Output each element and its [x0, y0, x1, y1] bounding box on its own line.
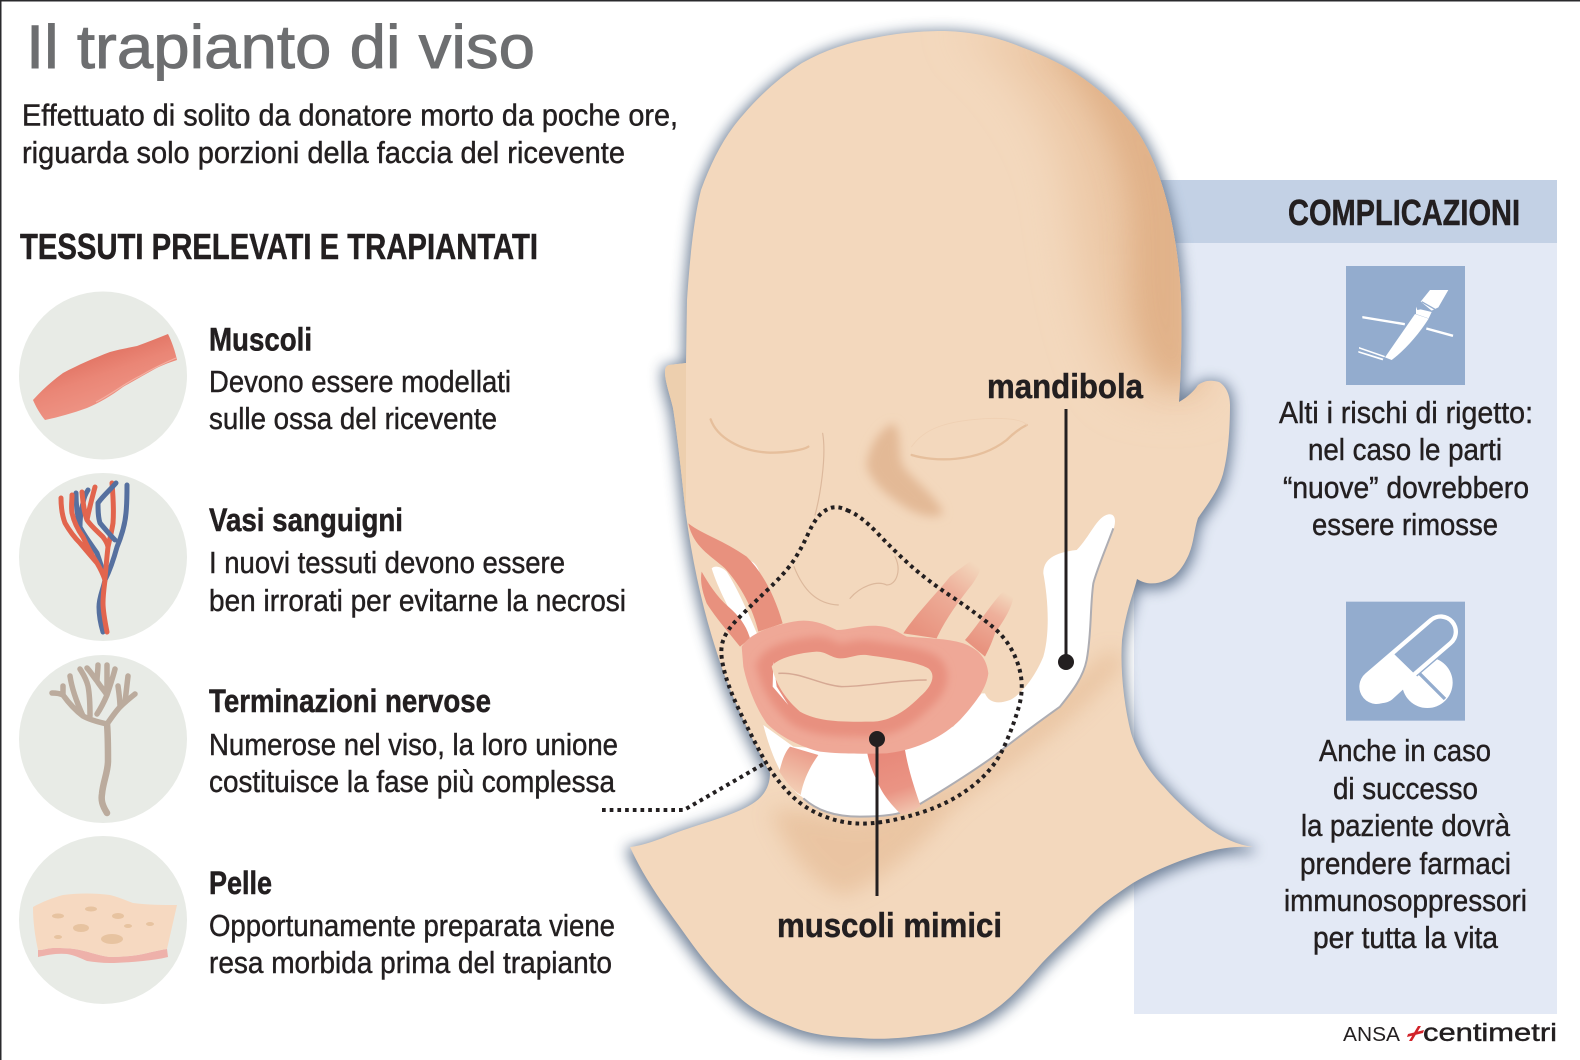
illustration: face and neck — [630, 25, 1253, 1039]
item: pelle: Pelle — [209, 865, 272, 901]
text: immunosoppressori: prendere farmaci — [1300, 846, 1511, 881]
text: immunosoppressori: immunosoppressori — [1284, 883, 1527, 918]
credit: ansa centimetri: centimetri — [1423, 1019, 1557, 1047]
item: pelle: Opportunamente preparata viene — [209, 908, 615, 943]
item: vasi sanguigni: I nuovi tessuti devono essere — [209, 545, 565, 580]
credit: ansa centimetri: ANSA — [1343, 1024, 1401, 1046]
cheekbone — [712, 561, 761, 640]
subtitle: Effettuato di solito da donatore morto da poche ore, — [22, 98, 678, 132]
label: mandibola: mandibola — [987, 368, 1144, 406]
text: rigetto: essere rimosse — [1312, 507, 1498, 542]
mandible bone — [763, 514, 1115, 817]
facial muscles — [688, 523, 1014, 814]
item: muscoli — [19, 292, 511, 460]
nose shadow — [867, 423, 943, 516]
head shadow — [630, 34, 1253, 1042]
icon: blood vessels — [19, 473, 187, 641]
eyes — [711, 418, 1027, 459]
text: immunosoppressori — [1284, 733, 1527, 955]
panel: complicazioni background — [1134, 180, 1557, 1014]
item: muscoli: Devono essere modellati — [209, 364, 511, 399]
item: muscoli: Muscoli — [209, 322, 312, 358]
subtitle — [22, 98, 678, 170]
label: mandibola — [987, 368, 1144, 670]
icon: muscle — [19, 292, 187, 460]
item: terminazioni nervose: costituisce la fase più complessa — [209, 764, 616, 799]
orbicularis mouth muscle — [742, 621, 988, 754]
credit: ansa centimetri — [1343, 1019, 1557, 1047]
text: immunosoppressori: di successo — [1333, 771, 1478, 806]
text: immunosoppressori: per tutta la vita — [1313, 920, 1499, 955]
icon: scalpel — [1346, 266, 1465, 385]
item: terminazioni nervose: Terminazioni nervose — [209, 683, 491, 719]
text: immunosoppressori: la paziente dovrà — [1301, 808, 1511, 843]
nose lines — [794, 433, 898, 605]
icon: pills — [1346, 602, 1465, 721]
dotted transplant area — [721, 507, 1022, 824]
subtitle: riguarda solo porzioni della faccia del ricevente — [22, 135, 625, 170]
text: rigetto — [1279, 395, 1533, 542]
item: muscoli: sulle ossa del ricevente — [209, 401, 497, 436]
text: rigetto: nel caso le parti — [1308, 432, 1502, 467]
label: muscoli mimici — [777, 731, 1002, 945]
item: vasi sanguigni: ben irrorati per evitarne la necrosi — [209, 583, 626, 618]
dotted leader: transplant area to text — [602, 762, 767, 810]
label: muscoli mimici: muscoli mimici — [777, 907, 1002, 945]
text: immunosoppressori: Anche in caso — [1319, 733, 1491, 768]
text: rigetto: Alti i rischi di rigetto: — [1279, 395, 1533, 430]
heading: complicazioni: COMPLICAZIONI — [1288, 192, 1520, 233]
heading: tessuti prelevati e trapiantati: TESSUTI PRELEVATI E TRAPIANTATI — [20, 226, 538, 267]
head side shading — [660, 25, 1200, 895]
item: pelle: resa morbida prima del trapianto — [209, 945, 612, 980]
item: terminazioni nervose: Numerose nel viso, la loro unione — [209, 727, 618, 762]
item: vasi sanguigni: Vasi sanguigni — [209, 502, 403, 538]
title: Il trapianto di viso — [26, 13, 535, 81]
icon: nerve endings — [19, 655, 187, 823]
icon: skin — [19, 836, 187, 1004]
item: vasi sanguigni — [19, 473, 626, 641]
item: pelle — [19, 836, 615, 1004]
face details — [688, 418, 1115, 824]
text: rigetto: “nuove” dovrebbero — [1283, 470, 1529, 505]
item: terminazioni nervose — [19, 655, 618, 823]
